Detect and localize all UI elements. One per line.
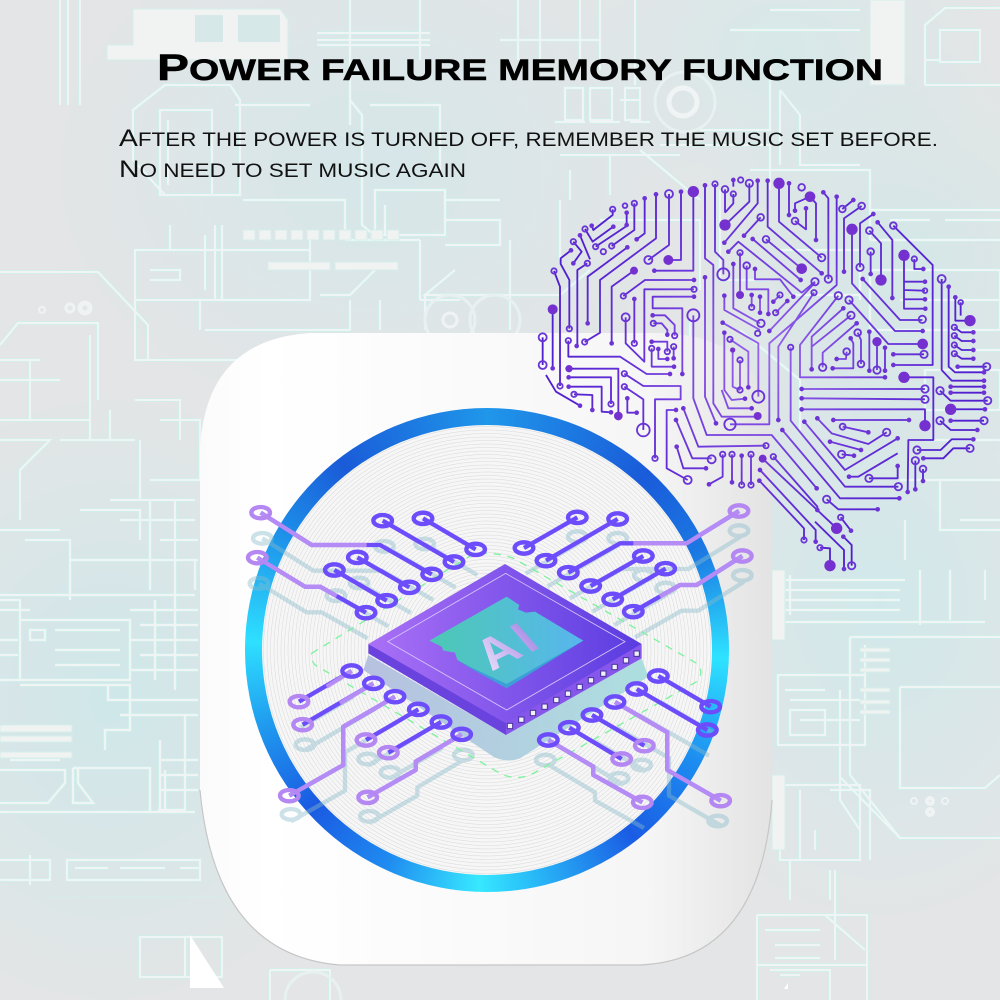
AI chip [368, 564, 642, 735]
brain small nodes [553, 180, 985, 569]
AI lettering: AI [463, 612, 552, 680]
title: POWER FAILURE MEMORY FUNCTION [157, 47, 883, 88]
blue ring of the speaker [245, 408, 729, 892]
white triangle artifact [190, 935, 224, 988]
small white mark [784, 983, 788, 989]
chip pins [507, 651, 639, 729]
description line 2: NO NEED TO SET MUSIC AGAIN [119, 156, 466, 183]
concentric coil disc [262, 425, 712, 875]
description line 1: AFTER THE POWER IS TURNED OFF, REMEMBER THE MUSIC SET BEFORE. [119, 125, 938, 152]
shadow traces [250, 525, 752, 828]
brain large nodes [548, 178, 976, 571]
brain traces [543, 180, 988, 569]
brain open pads [539, 177, 991, 569]
green dashed loop [311, 553, 701, 777]
chip shadow [363, 655, 648, 760]
chip traces with pads [248, 505, 752, 808]
